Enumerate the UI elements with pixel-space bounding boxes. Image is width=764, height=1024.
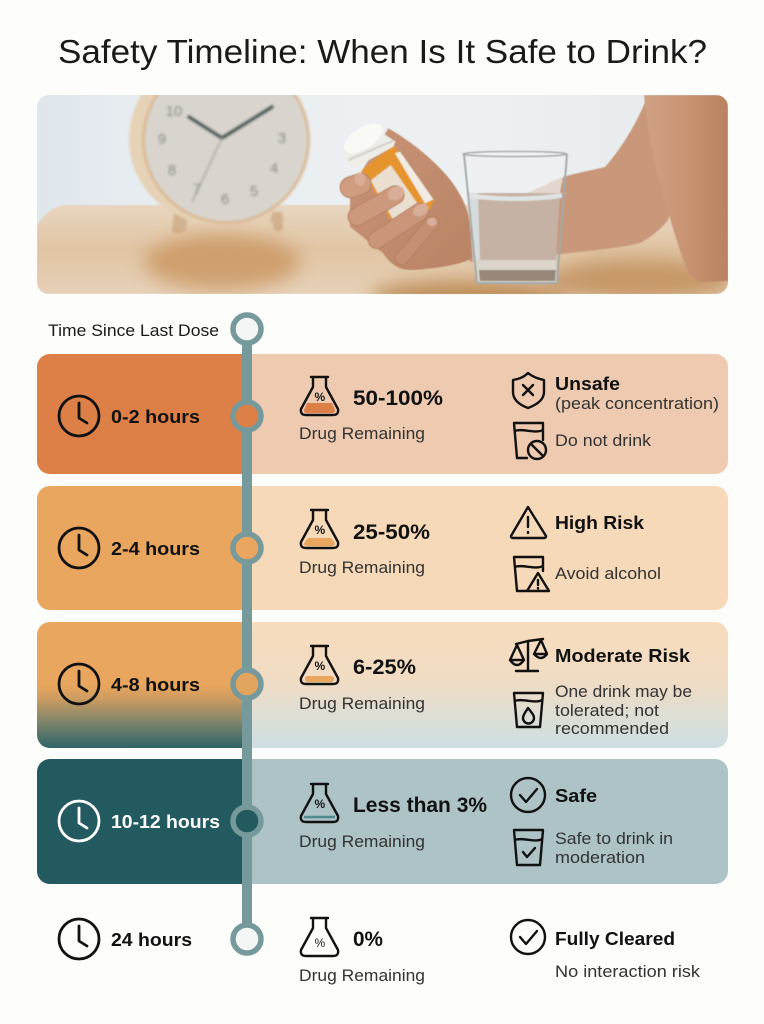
risk: fully cleared: Fully Cleared	[555, 928, 675, 949]
time label: 0-2 hours: 0-2 hours	[111, 406, 200, 427]
icon: shield with x	[513, 373, 544, 408]
icon: check circle	[511, 778, 545, 812]
clock: 5	[250, 183, 258, 200]
panel: row 4-8 hours	[37, 622, 728, 748]
risk: high risk: High Risk	[555, 512, 645, 533]
fingers	[351, 184, 432, 258]
bottle body	[361, 146, 434, 220]
panel: row 0-2 hours	[37, 354, 728, 474]
icon: glass with ban sign	[514, 423, 546, 459]
drug level: 25-50%: %	[314, 523, 326, 537]
icon: check circle	[511, 920, 545, 954]
icon: glass with check	[514, 830, 543, 865]
risk: unsafe: Unsafe	[555, 373, 620, 394]
panel: row 2-4 hours	[37, 486, 728, 610]
drug level: less than 3%: %	[314, 797, 326, 811]
timeline axis with nodes	[233, 315, 261, 953]
risk: high risk: Avoid alcohol	[555, 565, 661, 583]
drug level: 6-25%	[299, 646, 425, 713]
risk: moderate risk: One drink may be	[555, 683, 692, 701]
risk: moderate risk: Moderate Risk	[555, 645, 691, 666]
time label: 10-12 hours	[59, 801, 220, 841]
drug level: 50-100%	[299, 377, 443, 443]
upper arm	[470, 100, 690, 262]
risk: fully cleared: No interaction risk	[555, 963, 701, 981]
drug level: 25-50%: 25-50%	[353, 521, 430, 544]
drug level: 25-50%: Drug Remaining	[299, 559, 425, 577]
risk: unsafe: (peak concentration)	[555, 395, 719, 413]
drug level: 6-25%: 6-25%	[353, 656, 416, 679]
clock: 3	[278, 130, 286, 147]
icon: glass with warning	[514, 557, 549, 591]
risk: unsafe: Do not drink	[555, 432, 652, 450]
drug level: 25-50%	[299, 510, 430, 577]
risk: moderate risk: recommended	[555, 720, 669, 738]
risk: moderate risk	[510, 639, 692, 738]
drug level: 50-100%: 50-100%	[353, 387, 443, 410]
axis label: Time Since Last Dose	[48, 322, 219, 340]
drug level: 6-25%: %	[314, 659, 326, 673]
risk: fully cleared	[511, 920, 701, 981]
drug level: 0%: 0%	[353, 928, 383, 951]
photo: clock, pill bottle, glass of water	[37, 95, 728, 294]
time label: 0-2 hours	[59, 396, 200, 436]
risk: safe: Safe to drink in	[555, 830, 673, 848]
clock: 7	[193, 181, 201, 198]
time label: 10-12 hours: 10-12 hours	[111, 811, 220, 832]
icon: glass with drop	[514, 693, 543, 727]
title: Safety Timeline: When Is It Safe to Drink?	[58, 33, 707, 70]
time label: 24 hours	[59, 919, 192, 959]
clock: 4	[270, 160, 278, 177]
icon: balance scales	[510, 639, 547, 671]
drug level: 0%	[299, 918, 425, 985]
bottle cap	[344, 134, 396, 168]
drug level: less than 3%: Drug Remaining	[299, 833, 425, 851]
drug level: less than 3%	[299, 784, 487, 851]
drug level: 0%: Drug Remaining	[299, 967, 425, 985]
drug level: 50-100%: %	[314, 390, 326, 404]
panel: row 10-12 hours	[37, 759, 728, 884]
hand and bottle	[339, 117, 472, 270]
drug level: 6-25%: Drug Remaining	[299, 695, 425, 713]
risk: safe	[511, 778, 673, 867]
drug level: 0%: %	[314, 936, 326, 950]
forearm	[644, 95, 728, 282]
risk: unsafe	[513, 373, 719, 459]
clock: 8	[168, 162, 176, 179]
risk: moderate risk: tolerated; not	[555, 702, 659, 720]
clock: 6	[221, 191, 229, 208]
drug level: less than 3%: Less than 3%	[353, 794, 487, 817]
clock: 9	[158, 131, 166, 148]
icon: warning triangle	[511, 507, 546, 538]
drug level: 50-100%: Drug Remaining	[299, 425, 425, 443]
risk: high risk	[511, 507, 661, 591]
time label: 2-4 hours	[59, 528, 200, 568]
time label: 4-8 hours: 4-8 hours	[111, 674, 200, 695]
time label: 24 hours: 24 hours	[111, 929, 192, 950]
risk: safe: moderation	[555, 849, 645, 867]
glass of water	[463, 152, 567, 283]
time label: 4-8 hours	[59, 664, 200, 704]
time label: 2-4 hours: 2-4 hours	[111, 538, 200, 559]
table	[37, 205, 728, 294]
clock: 10	[166, 103, 182, 120]
risk: safe: Safe	[555, 785, 597, 806]
clock	[128, 95, 312, 234]
